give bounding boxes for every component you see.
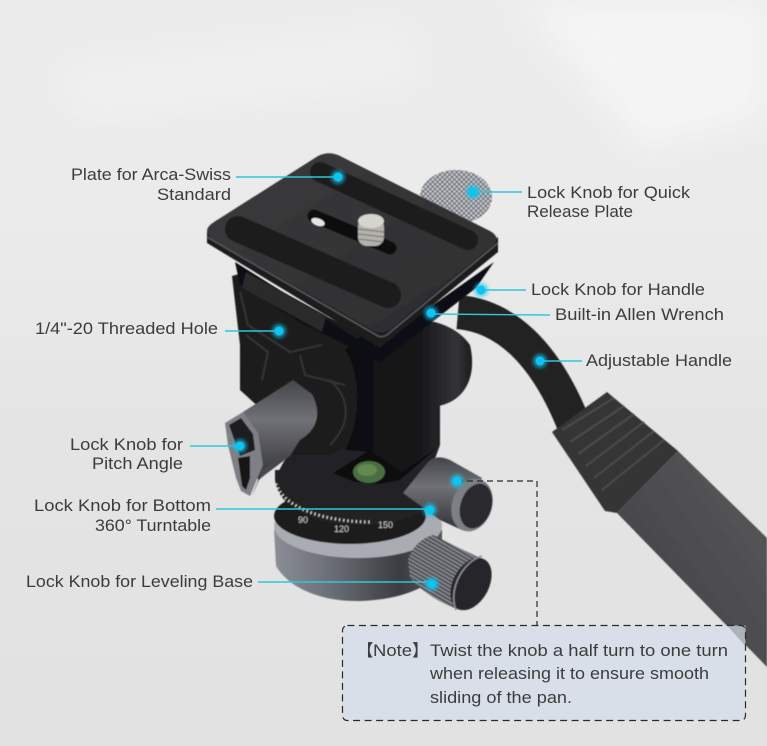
callout: lock knob for handle: Lock Knob for Handle (531, 281, 705, 299)
note box (342, 626, 746, 720)
neck (275, 400, 440, 510)
turntable scale: 150 (378, 520, 393, 530)
lock knob: pitch angle (225, 380, 317, 496)
callout: plate for arca-swiss (71, 166, 345, 204)
callout: lock knob for leveling base: Lock Knob for Leveling Base (26, 573, 253, 591)
callout: lock knob for bottom turntable (34, 497, 437, 535)
side clip (242, 272, 326, 332)
callout: lock knob for quick release plate: Lock Knob for Quick (527, 184, 691, 202)
lock knob: leveling base (408, 535, 500, 617)
note text: sliding of the pan. (430, 689, 572, 707)
callout: lock knob for bottom turntable: 360° Turntable (95, 517, 211, 535)
hotspot: note knob (450, 474, 464, 488)
callout: built-in allen wrench (424, 306, 724, 324)
main column (232, 272, 372, 455)
callout: lock knob for pitch angle: Lock Knob for (70, 436, 184, 454)
lock knob: quick release plate (420, 170, 492, 224)
camera screw (358, 214, 384, 246)
callout: lock knob for pitch angle: Pitch Angle (92, 455, 183, 473)
callout: plate for arca-swiss: Plate for Arca-Swiss (71, 166, 231, 184)
quick release plate (207, 153, 498, 362)
turntable scale: 120 (334, 524, 349, 534)
cheek embossing (240, 292, 346, 445)
base cylinder (274, 530, 442, 601)
callout: lock knob for handle (474, 281, 705, 299)
handle ridges (562, 398, 664, 490)
callout: lock knob for quick release plate: Release Plate (527, 203, 633, 221)
callout: built-in allen wrench: Built-in Allen Wrench (555, 306, 724, 324)
handle sleeve (552, 392, 678, 513)
lock knob: turntable (403, 457, 499, 537)
callout: lock knob for leveling base (26, 573, 439, 591)
adjustable handle (458, 312, 767, 667)
note tag: 】 (412, 641, 428, 660)
callout: threaded hole: 1/4"-20 Threaded Hole (35, 320, 218, 338)
plate grip pads (320, 172, 468, 240)
bubble level (333, 403, 438, 484)
callout: plate for arca-swiss: Standard (157, 186, 231, 204)
note tag: Note (373, 642, 412, 660)
callout: lock knob for quick release plate (466, 184, 691, 221)
turntable scale (275, 470, 430, 534)
dashed guide to note (457, 481, 537, 625)
callout: adjustable handle (533, 352, 732, 370)
ball housing (345, 319, 472, 472)
callout: threaded hole (35, 320, 286, 338)
knob end face (225, 412, 263, 496)
callout: adjustable handle: Adjustable Handle (586, 352, 732, 370)
note text (429, 642, 728, 707)
note tag (357, 641, 428, 660)
note text: when releasing it to ensure smooth (429, 665, 709, 683)
callout: lock knob for pitch angle (70, 436, 247, 473)
slot (314, 216, 390, 248)
tripod head body (232, 272, 472, 601)
foam grip (617, 451, 767, 667)
callout: lock knob for bottom turntable: Lock Knob for Bottom (34, 497, 211, 515)
note tag: 【 (357, 641, 374, 660)
turntable scale: 90 (298, 515, 308, 525)
note text: Twist the knob a half turn to one turn (430, 642, 728, 660)
